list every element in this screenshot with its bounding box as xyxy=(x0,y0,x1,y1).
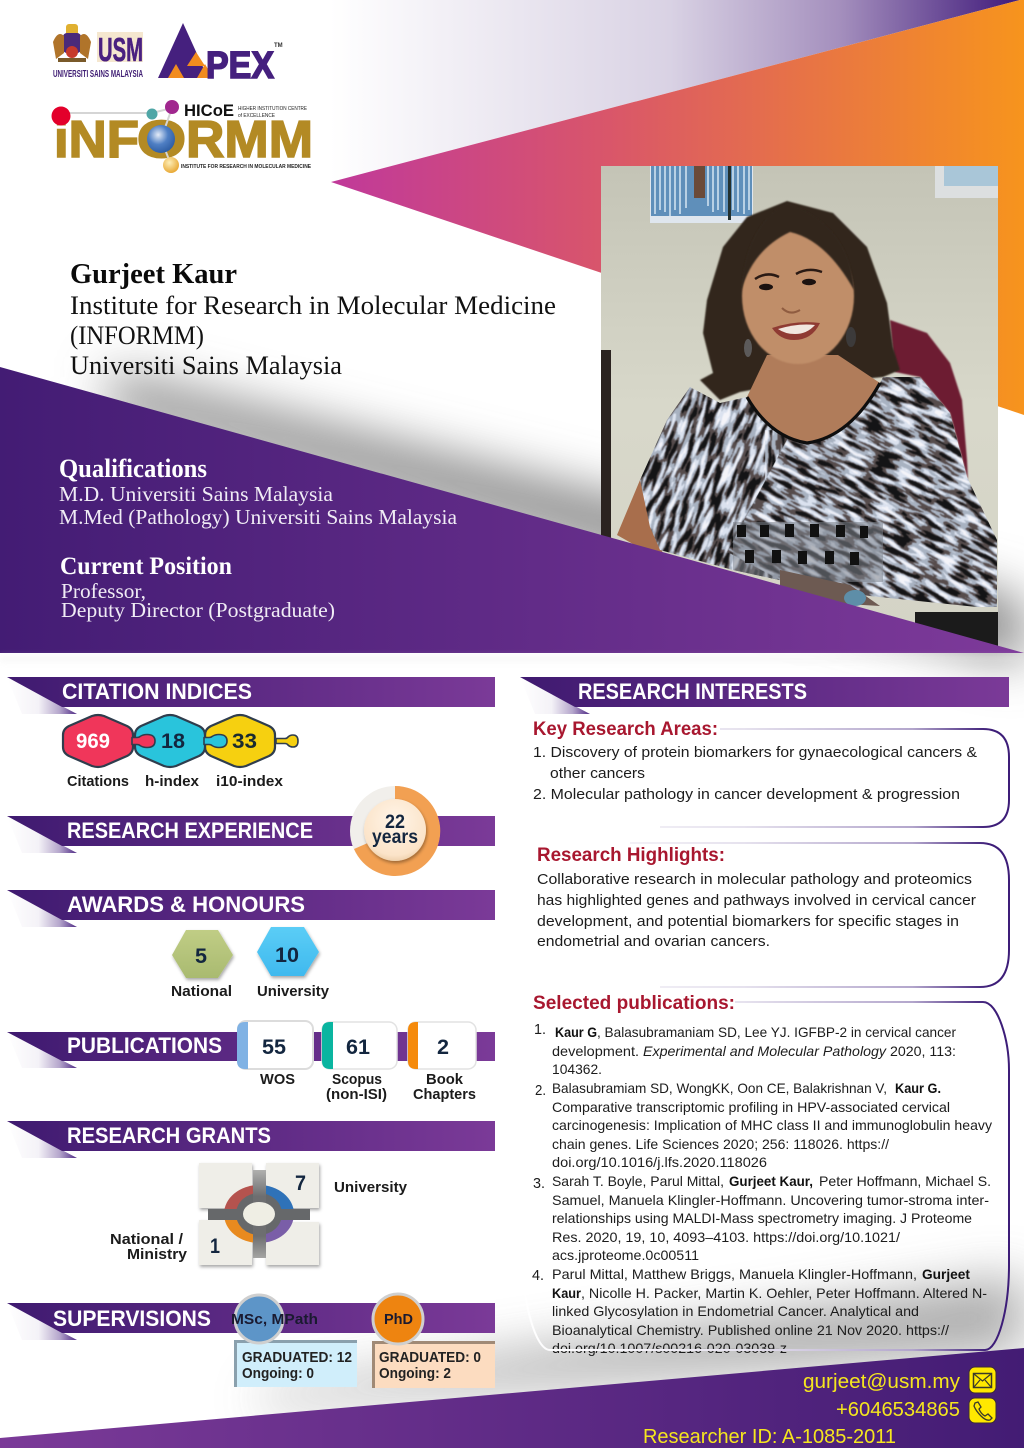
heading: research experience: RESEARCH EXPERIENCE xyxy=(67,818,313,843)
citation labels: Citations xyxy=(67,773,129,790)
text: publication 3: 3. xyxy=(533,1175,545,1192)
award: university xyxy=(257,927,330,1000)
desk xyxy=(915,612,998,646)
heading: publications: PUBLICATIONS xyxy=(67,1033,222,1058)
donut: 22 years: years xyxy=(372,827,418,848)
nose shadow xyxy=(782,308,800,313)
text: publication 2: Kaur G. xyxy=(895,1081,941,1096)
researcher name and affiliation: Gurjeet Kaur xyxy=(70,258,237,290)
text: publication 3: relationships using MALDI-Mass spectrometry imaging. J Proteome xyxy=(552,1211,972,1226)
grant labels: Ministry xyxy=(127,1246,188,1263)
citation numbers xyxy=(76,730,257,753)
text: publication 1 xyxy=(534,1021,956,1077)
donut: 22 years xyxy=(350,786,440,876)
card: book chapters: Book xyxy=(426,1071,464,1088)
section: supervisions xyxy=(7,1303,495,1340)
logo: USM crest xyxy=(53,24,91,62)
top white to purple gradient triangle xyxy=(331,0,1020,182)
contact details: gurjeet@usm.my xyxy=(803,1371,960,1393)
text: highlights paragraph: endometrial and ovarian cancers. xyxy=(537,934,770,950)
text: publication 3: Peter Hoffmann, Michael S. xyxy=(819,1174,991,1189)
logo: APEX xyxy=(158,23,283,87)
logo: INFORMM: HIGHER INSTITUTION CENTRE xyxy=(238,106,307,112)
portrait photo xyxy=(601,166,998,646)
contact details: +6046534865 xyxy=(836,1399,960,1421)
researcher name and affiliation xyxy=(70,258,556,380)
neckline xyxy=(747,383,880,443)
heading: research grants: RESEARCH GRANTS xyxy=(67,1123,271,1148)
citation numbers: 33 xyxy=(232,730,257,753)
card: WOS: WOS xyxy=(260,1071,295,1088)
text: publication 3: Samuel, Manuela Klingler-Hoffmann. Uncovering tumor-stroma inter- xyxy=(552,1193,989,1208)
card: Scopus: 61 xyxy=(346,1036,370,1059)
hair fringe xyxy=(742,227,854,290)
section: research experience xyxy=(7,816,495,853)
footer band xyxy=(0,1348,1024,1448)
heading: awards: AWARDS & HONOURS xyxy=(67,892,305,917)
text: publication 3: acs.jproteome.0c00511 xyxy=(552,1248,699,1263)
icon: phone xyxy=(969,1398,996,1423)
text: publication 2: 2. xyxy=(535,1082,546,1099)
logo: INFORMM: O xyxy=(137,111,186,169)
card: book chapters: Chapters xyxy=(413,1086,476,1103)
text: publication 1: development. xyxy=(552,1044,639,1059)
current position xyxy=(60,553,335,622)
contact details xyxy=(643,1371,960,1448)
purple header panel xyxy=(0,367,1024,653)
logo: APEX: TM xyxy=(274,43,283,49)
text: publication 4: linked Glycosylation in Endometrial Cancer. Analytical and xyxy=(552,1304,919,1319)
grant labels: National / xyxy=(110,1231,184,1248)
heading: key research areas: Key Research Areas: xyxy=(533,718,718,740)
text: publication 2: Balasubramiam SD, WongKK, Oon CE, Balakrishnan V, xyxy=(552,1081,887,1096)
heading: research interests: RESEARCH INTERESTS xyxy=(578,679,807,704)
earrings xyxy=(744,327,856,357)
logo: APEX: PEX xyxy=(206,45,275,87)
card: WOS xyxy=(237,1021,313,1088)
dark cabinet at left edge xyxy=(601,350,611,538)
publications box outline xyxy=(523,1002,1009,1350)
contact details: Researcher ID: A-1085-2011 xyxy=(643,1426,896,1448)
logo: USM wordmark: UNIVERSITI SAINS MALAYSIA xyxy=(53,69,143,80)
blouse xyxy=(640,377,997,607)
text: publication 2 xyxy=(535,1081,992,1170)
heading: citation indices: CITATION INDICES xyxy=(62,679,252,704)
logo: INFORMM xyxy=(52,100,313,173)
logo: USM wordmark xyxy=(53,31,143,80)
text: research areas list: 2. Molecular pathology in cancer development & progression xyxy=(533,787,960,803)
text: highlights paragraph: development, and potential biomarkers for specific stages in xyxy=(537,914,959,930)
qualifications: M.Med (Pathology) Universiti Sains Malaysia xyxy=(59,505,458,529)
text: publication 3: Gurjeet Kaur, xyxy=(729,1174,813,1189)
box: MSc supervision: GRADUATED: 12 xyxy=(242,1349,352,1366)
neck and chest xyxy=(747,355,880,443)
current position: Deputy Director (Postgraduate) xyxy=(61,598,335,622)
grant labels xyxy=(110,1179,408,1263)
box: MSc supervision: Ongoing: 0 xyxy=(242,1365,314,1382)
box: PhD supervision: Ongoing: 2 xyxy=(379,1365,451,1382)
text: research areas list: 1. Discovery of protein biomarkers for gynaecological cancers & xyxy=(533,745,977,761)
eyes and brows xyxy=(755,270,822,290)
text: publication 3: Sarah T. Boyle, Parul Mittal, xyxy=(552,1174,724,1189)
text: publication 1: Kaur G xyxy=(555,1025,597,1040)
text: research areas list xyxy=(533,745,977,803)
heading: supervisions: SUPERVISIONS xyxy=(53,1306,211,1331)
card: Scopus xyxy=(322,1022,397,1103)
logo: USM wordmark: USM xyxy=(98,31,143,68)
text: publication 4: Kaur xyxy=(552,1286,582,1301)
section: publications xyxy=(7,1032,495,1068)
card: book chapters: 2 xyxy=(437,1036,449,1059)
footer shadow xyxy=(260,1275,1024,1406)
card: book chapters xyxy=(408,1022,476,1103)
qualifications xyxy=(59,454,458,529)
chart: grants quadrant: 1 xyxy=(210,1235,220,1258)
panel: selected publications xyxy=(523,992,1009,1356)
box: PhD supervision xyxy=(372,1294,495,1388)
text: publication 2: carcinogenesis: Implication of MHC class II and immunoglobulin heavy xyxy=(552,1118,992,1133)
chair xyxy=(890,320,968,480)
hair xyxy=(700,201,900,400)
box: PhD supervision: GRADUATED: 0 xyxy=(379,1349,481,1366)
qualifications: M.D. Universiti Sains Malaysia xyxy=(59,482,334,506)
logo: INFORMM: iNF xyxy=(54,111,139,169)
text: research areas list: other cancers xyxy=(550,766,645,782)
text: publication 4: Gurjeet xyxy=(922,1267,970,1282)
text: publication 4: Parul Mittal, Matthew Briggs, Manuela Klingler-Hoffmann, xyxy=(552,1267,917,1282)
text: publication 1: Experimental and Molecular Pathology xyxy=(643,1044,887,1059)
poster left xyxy=(650,166,753,223)
award: national: National xyxy=(171,983,232,1000)
text: highlights paragraph: has highlighted genes and pathways involved in cervical cancer xyxy=(537,893,976,909)
text: publication 3: Res. 2020, 19, 10, 4093–4103. https://doi.org/10.1021/ xyxy=(552,1230,900,1245)
citation labels: h-index xyxy=(145,773,200,790)
orange magenta gradient wedge xyxy=(331,0,1024,415)
text: publication 1: 104362. xyxy=(552,1062,602,1077)
text: publication 2: Comparative transcriptomic profiling in HPV-associated cervical xyxy=(552,1100,950,1115)
citation numbers: 18 xyxy=(161,730,185,753)
section: awards and honours xyxy=(7,890,495,927)
citation labels xyxy=(67,773,284,790)
text: publication 1: , Balasubramaniam SD, Lee YJ. IGFBP-2 in cervical cancer xyxy=(597,1025,956,1040)
text: publication 2: doi.org/10.1016/j.lfs.2020.118026 xyxy=(552,1155,767,1170)
researcher name and affiliation: (INFORMM) xyxy=(70,321,204,350)
logo: INFORMM: INSTITUTE FOR RESEARCH IN MOLECULAR MEDICINE xyxy=(181,164,311,170)
text: publication 4 xyxy=(532,1267,987,1356)
face xyxy=(742,228,854,364)
text: publication 4: 4. xyxy=(532,1267,544,1284)
text: publication 4: Bioanalytical Chemistry. Published online 21 Nov 2020. https:// xyxy=(552,1323,949,1338)
qualifications: Qualifications xyxy=(59,454,207,483)
researcher name and affiliation: Universiti Sains Malaysia xyxy=(70,351,342,380)
text: highlights paragraph: Collaborative research in molecular pathology and proteomics xyxy=(537,872,972,888)
poster right xyxy=(935,166,998,198)
card: Scopus: (non-ISI) xyxy=(326,1086,387,1103)
award: national: 5 xyxy=(195,945,207,968)
text: publication 1: 2020, 113: xyxy=(890,1044,956,1059)
panel: research highlights xyxy=(537,843,1009,987)
award: university: University xyxy=(257,983,330,1000)
text: publication 1: 1. xyxy=(534,1021,546,1038)
box: MSc supervision xyxy=(231,1295,357,1387)
header shadow band xyxy=(110,372,1024,665)
current position: Current Position xyxy=(60,553,232,580)
icon: mail xyxy=(969,1367,996,1393)
card: Scopus: Scopus xyxy=(332,1071,382,1088)
left arm xyxy=(617,480,662,552)
chart: grants quadrant: 7 xyxy=(295,1172,306,1195)
chart: grants quadrant xyxy=(199,1163,319,1265)
text: publication 4: , Nicolle H. Packer, Martin K. Oehler, Peter Hoffmann. Altered N- xyxy=(581,1286,987,1301)
panel: key research areas xyxy=(533,718,1009,827)
smile xyxy=(772,322,820,340)
logo: INFORMM: of EXCELLENCE xyxy=(238,113,275,119)
donut: 22 years: 22 xyxy=(385,812,405,833)
heading: selected publications: Selected publications: xyxy=(533,992,735,1014)
heading: research highlights: Research Highlights: xyxy=(537,844,725,866)
citation numbers: 969 xyxy=(76,730,110,753)
grant labels: University xyxy=(334,1179,408,1196)
citation labels: i10-index xyxy=(216,773,284,790)
text: publication 2: chain genes. Life Sciences 2020; 256: 118026. https:// xyxy=(552,1137,889,1152)
subtle shadow below header xyxy=(0,655,1024,663)
box: MSc supervision: MSc, MPath xyxy=(231,1311,318,1328)
section: citation indices xyxy=(7,677,495,714)
text: publication 3 xyxy=(533,1174,991,1263)
card: WOS: 55 xyxy=(262,1036,286,1059)
forearm and watch xyxy=(780,570,880,606)
box: PhD supervision: PhD xyxy=(384,1311,413,1328)
logo: INFORMM: RMM xyxy=(186,111,313,169)
logo: INFORMM: HICoE xyxy=(184,101,234,120)
section: research interests xyxy=(520,677,1009,714)
award: university: 10 xyxy=(275,944,299,967)
researcher name and affiliation: Institute for Research in Molecular Medicine xyxy=(70,291,556,320)
award: national xyxy=(171,930,233,1000)
current position: Professor, xyxy=(61,579,146,603)
text: publication 4: doi.org/10.1007/s00216-020-03039-z xyxy=(552,1341,787,1356)
text: highlights paragraph xyxy=(537,872,976,950)
chart: citation hexagons xyxy=(63,715,298,767)
logos xyxy=(52,23,313,173)
section: research grants xyxy=(7,1121,495,1158)
